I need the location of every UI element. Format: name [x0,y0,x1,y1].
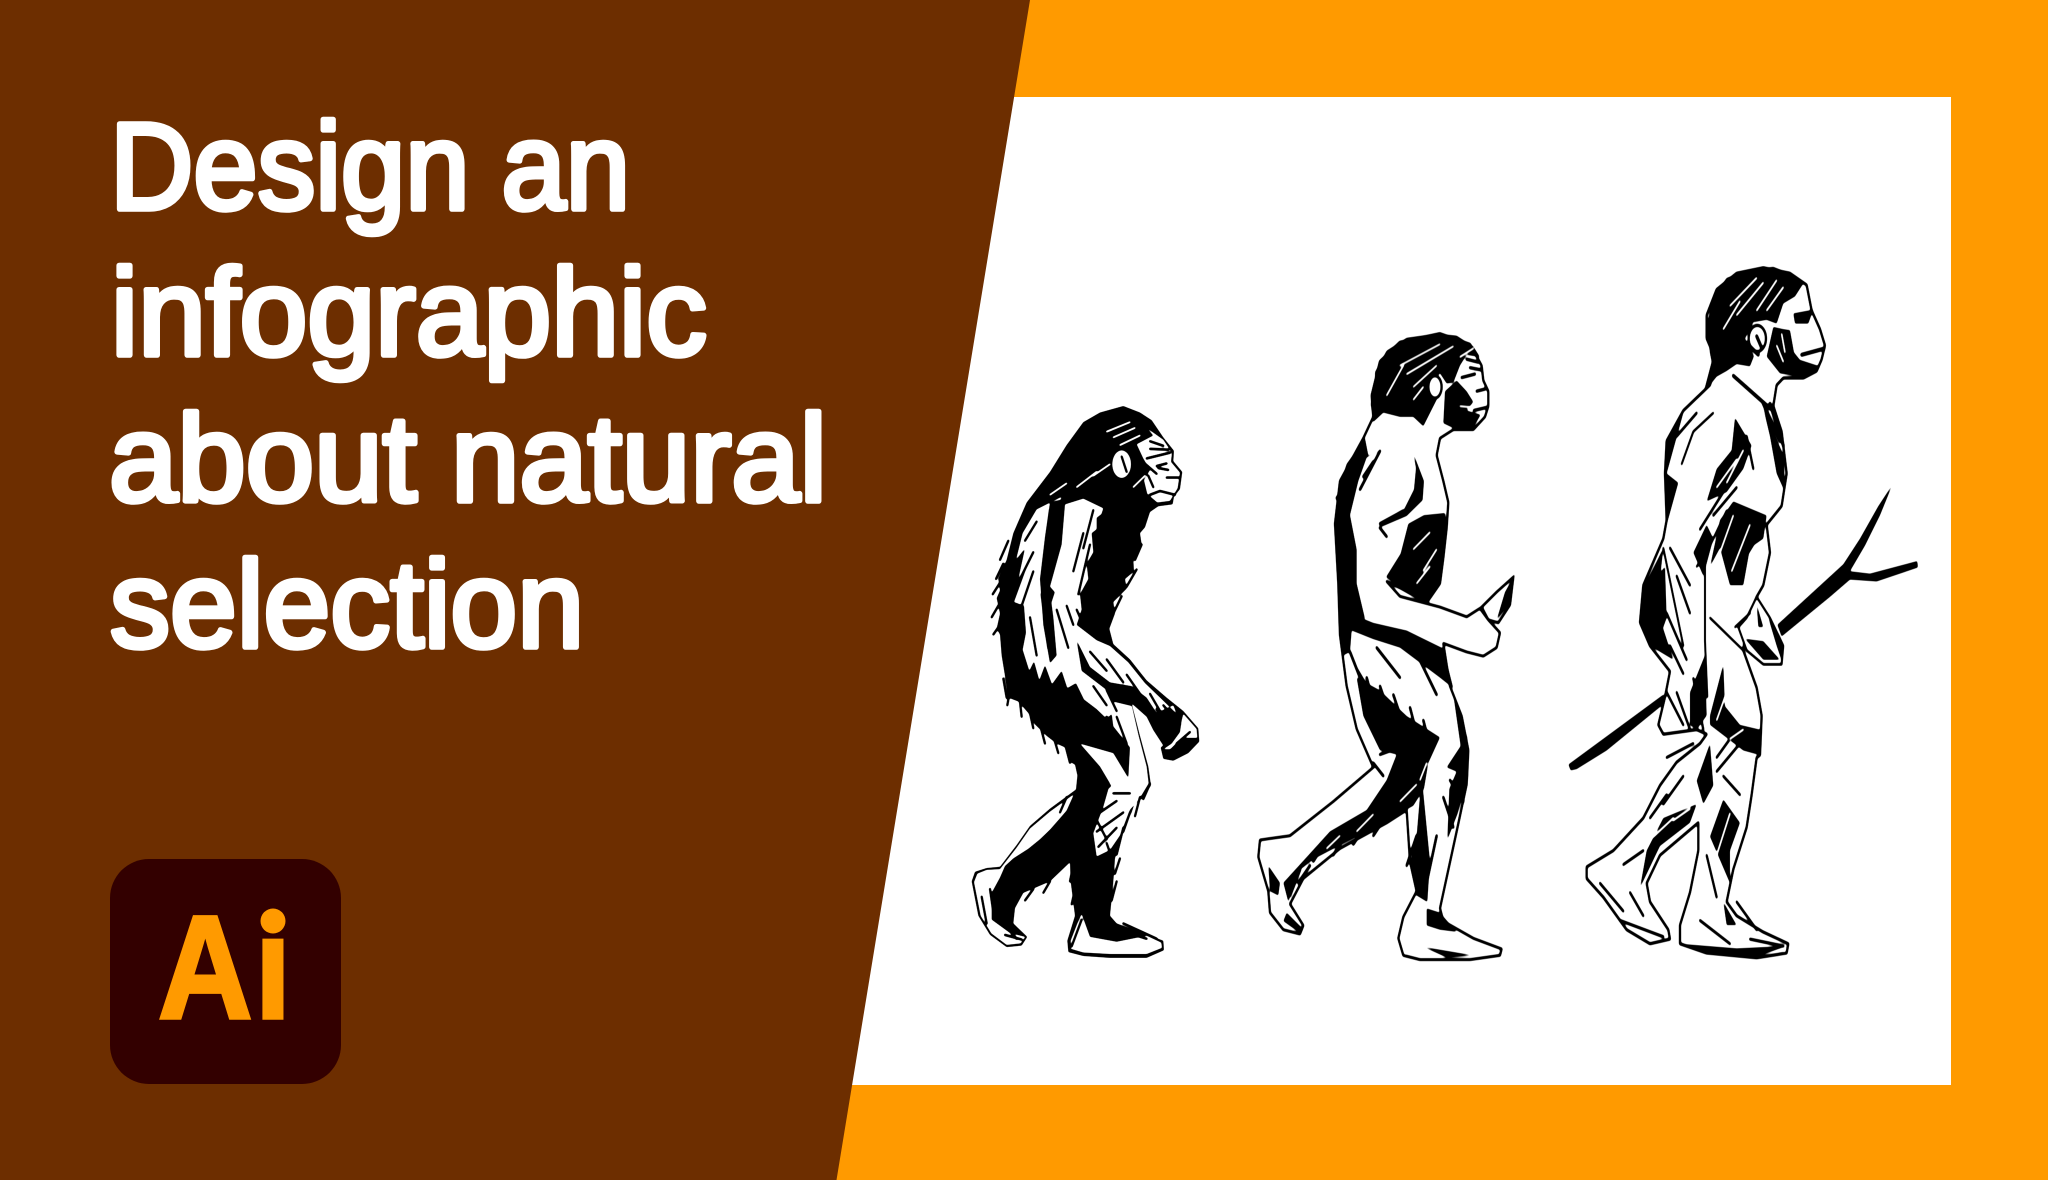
ancestor eye socket [1793,310,1813,324]
icon mask behind round dot [256,904,292,937]
hominid white hair streaks [1327,344,1473,849]
ape rear leg highlight [974,794,1074,945]
ancestor hatching [1600,413,1783,946]
hominid shin shadow [1410,776,1430,902]
hominid hair [1371,334,1480,426]
hominid beard [1443,381,1481,430]
title line 1: Design an [110,99,630,236]
ape torso highlight [1014,497,1117,719]
ape arm fur shadow band [1040,499,1108,663]
hominid body outline [1258,334,1502,960]
hominid fur hatching [1290,451,1463,896]
hominid hip fur [1339,609,1453,688]
title line 3: about natural [109,391,827,528]
panel: white illustration area [800,97,1951,1085]
illustration: upright human ancestor carrying a spear [1568,267,1918,958]
hominid back shadow [1335,438,1383,619]
hominid front leg shadow [1447,695,1468,840]
icon: Adobe Illustrator logo [110,859,341,1084]
ancestor back shadow [1641,413,1683,660]
ancestor hand holding spear [1738,597,1783,664]
ancestor arm and abdomen shadow [1693,501,1767,585]
ancestor body outline [1587,268,1825,958]
ancestor shoulder and chest shadow [1707,408,1785,501]
ape face [1137,428,1180,502]
ancestor arm contour lines [1663,413,1750,697]
ape front foot [1071,914,1162,954]
ancestor beard [1767,327,1820,377]
icon letters Ai: Ai [158,886,291,1050]
hominid ear [1428,376,1442,398]
ancestor ear [1749,325,1766,352]
ancestor forearm and hip shadow [1645,567,1760,755]
icon tile [110,859,341,1084]
ape thigh and shin highlight [1080,701,1149,856]
ape hair and head streaks [1050,422,1145,495]
panel: brown slanted title panel [0,0,1030,1180]
title line 2: infographic [111,245,707,382]
icon round i dot [260,908,286,934]
spear rear shaft [1568,695,1667,771]
stone tool shading [1497,577,1513,620]
ape fur fringe on back and legs [992,541,1150,908]
title: Design an infographic about natural selection [109,99,827,674]
ape fur hatching [982,502,1190,946]
spear front shaft and fork [1777,484,1918,636]
title line 4: selection [110,537,584,674]
hominid eye and mouth [1462,359,1487,410]
ape facial features [1122,441,1178,495]
ape arm highlight [1050,499,1177,714]
hominid feet shadow [1268,866,1473,958]
ape ear [1112,450,1131,478]
hominid rear thigh and leg shadow [1283,678,1440,902]
spear [1568,484,1918,771]
illustration: upright hominid holding a stone tool [1258,334,1513,960]
ape silhouette [972,406,1199,958]
ape hand [1163,714,1197,749]
ancestor white streaks through hair and shading [1653,278,1785,855]
ancestor leg shadow [1640,744,1787,957]
stone tool [1482,577,1513,623]
ancestor hand shading [1745,604,1784,663]
hominid abdomen shadow [1386,513,1447,602]
hominid chest shadow [1377,453,1424,529]
illustration: early ape-like hominid walking [972,406,1199,958]
ancestor features [1733,336,1824,446]
ancestor hair [1703,267,1803,393]
